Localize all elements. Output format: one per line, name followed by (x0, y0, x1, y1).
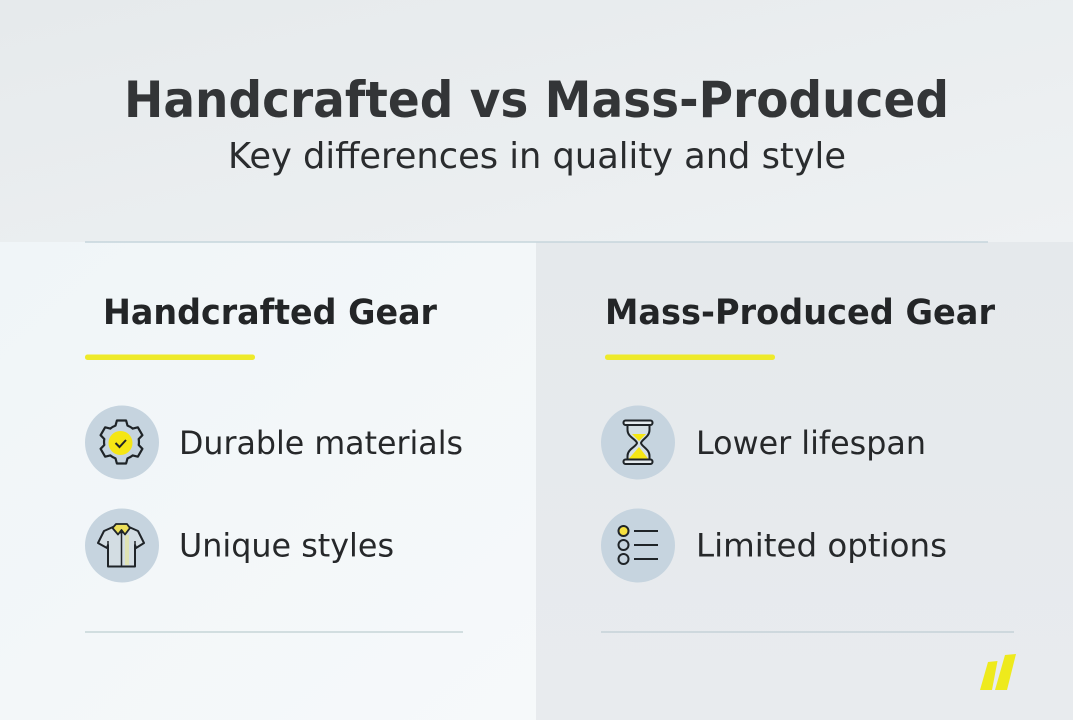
icon: hourglass (601, 406, 675, 480)
text: durable materials: Durable materials (179, 424, 463, 462)
icon: gear with check (85, 406, 159, 480)
panel: mass-produced gear (601, 293, 996, 582)
text: unique styles: Unique styles (179, 526, 394, 564)
icon: list (601, 508, 675, 582)
subtitle: Key differences in quality and style (228, 136, 846, 177)
panel: handcrafted gear (85, 293, 463, 582)
panel: mass-produced background (536, 242, 1073, 720)
text: limited options: Limited options (696, 526, 947, 564)
panel: handcrafted background (0, 242, 536, 720)
title: Handcrafted vs Mass-Produced (124, 71, 949, 129)
icon: shirt (85, 508, 159, 582)
heading: handcrafted gear: Handcrafted Gear (103, 293, 438, 333)
header background (0, 0, 1073, 242)
heading underline (85, 354, 255, 360)
text: lower lifespan: Lower lifespan (696, 424, 926, 462)
heading underline (605, 354, 775, 360)
heading: mass-produced gear: Mass-Produced Gear (605, 293, 996, 333)
icon: brand logo (980, 654, 1016, 690)
